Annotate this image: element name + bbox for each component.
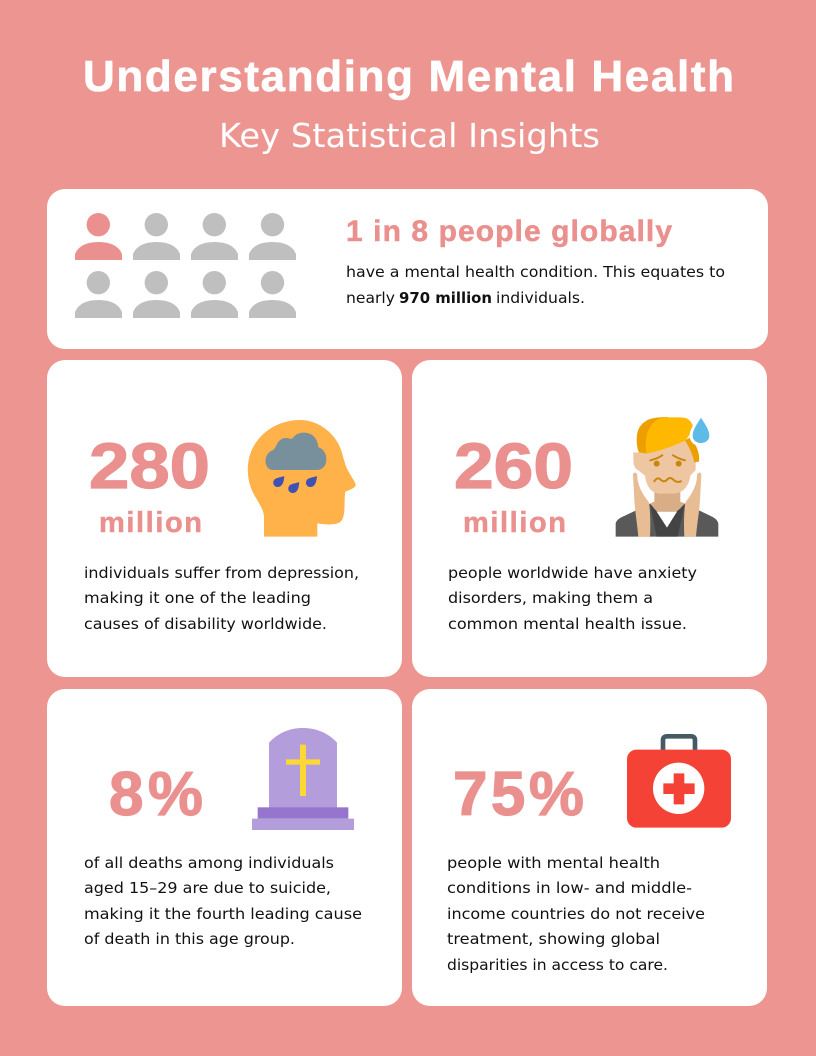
description [84,564,359,633]
icon: head with rain cloud [248,420,356,537]
panel: depression [47,360,402,677]
panel: 1 in 8 people [47,189,768,349]
description: 970 million [399,289,492,307]
description: disorders, making them a [448,589,653,607]
description: treatment, showing global [447,930,660,948]
description: making it one of the leading [84,589,311,607]
description: causes of disability worldwide. [84,615,327,633]
title: Understanding Mental Health [83,52,734,101]
description [84,854,362,948]
description [346,263,725,307]
description: aged 15–29 are due to suicide, [84,879,331,897]
icon: gravestone [252,728,354,830]
description [447,854,705,974]
panel: treatment gap [412,689,767,1006]
description: making it the fourth leading cause [84,905,362,923]
description: individuals suffer from depression, [84,564,359,582]
stat number: 280 [89,430,210,502]
stat unit: million [99,507,202,539]
icon: anxious man [616,414,718,537]
stat heading: 1 in 8 people globally [346,215,672,248]
panel: anxiety [412,360,767,677]
description [448,564,697,633]
description: conditions in low- and middle- [447,879,692,897]
icon: first aid kit [627,736,731,828]
description: common mental health issue. [448,615,687,633]
description: nearly [346,289,395,307]
description: income countries do not receive [447,905,705,923]
stat number: 8% [109,760,203,829]
stat number: 75% [453,760,584,829]
subtitle: Key Statistical Insights [219,116,600,155]
description: disparities in access to care. [447,956,668,974]
description: individuals. [496,289,585,307]
description: of death in this age group. [84,930,295,948]
panel: suicide [47,689,402,1006]
description: of all deaths among individuals [84,854,334,872]
description: have a mental health condition. This equates to [346,263,725,281]
icon: people grid [75,213,296,318]
description: people with mental health [447,854,660,872]
description: people worldwide have anxiety [448,564,697,582]
stat number: 260 [454,430,573,502]
stat unit: million [463,507,566,539]
